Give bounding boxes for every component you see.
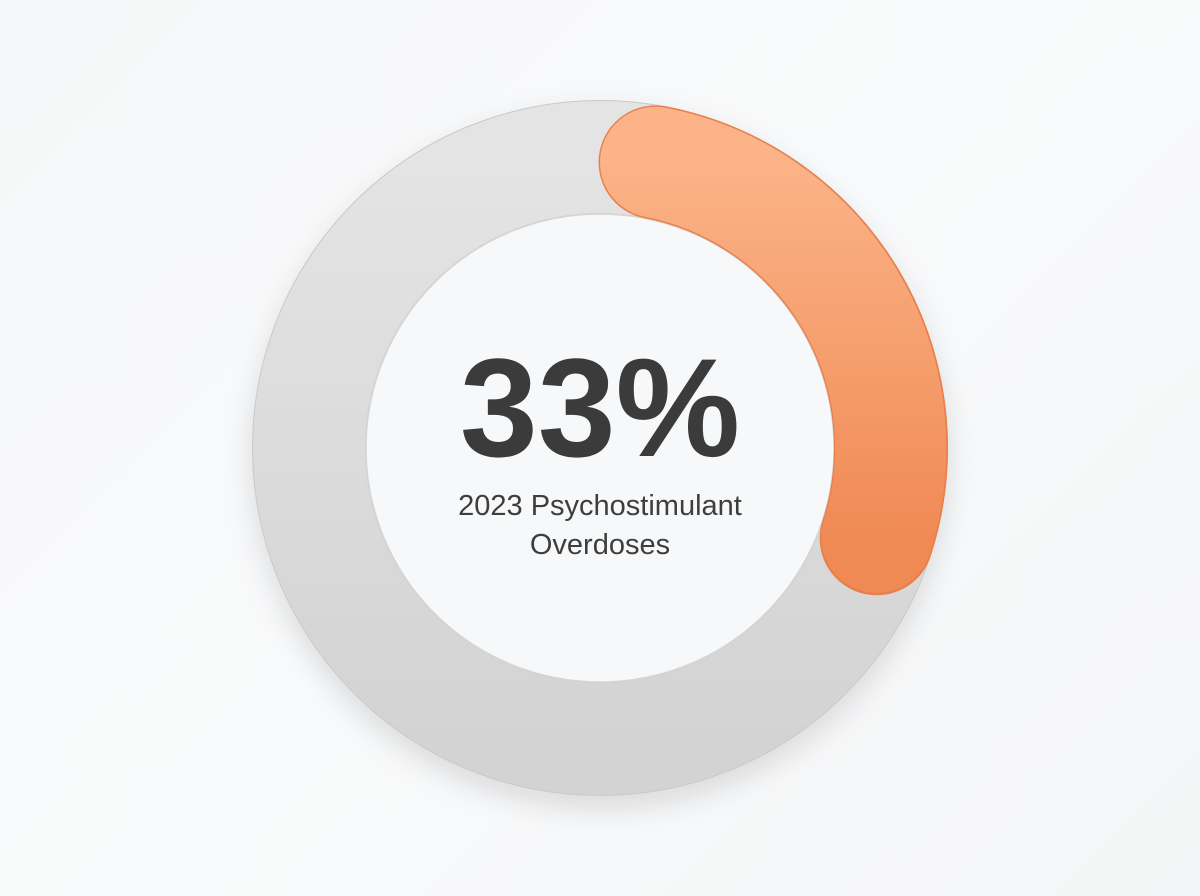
inner disc [366,214,834,682]
label: Overdoses [530,529,670,561]
label [458,490,742,561]
label: 2023 Psychostimulant [458,490,742,522]
big percentage: 33% [460,329,740,486]
ring track [309,157,891,739]
orange arc 33% [259,107,941,789]
